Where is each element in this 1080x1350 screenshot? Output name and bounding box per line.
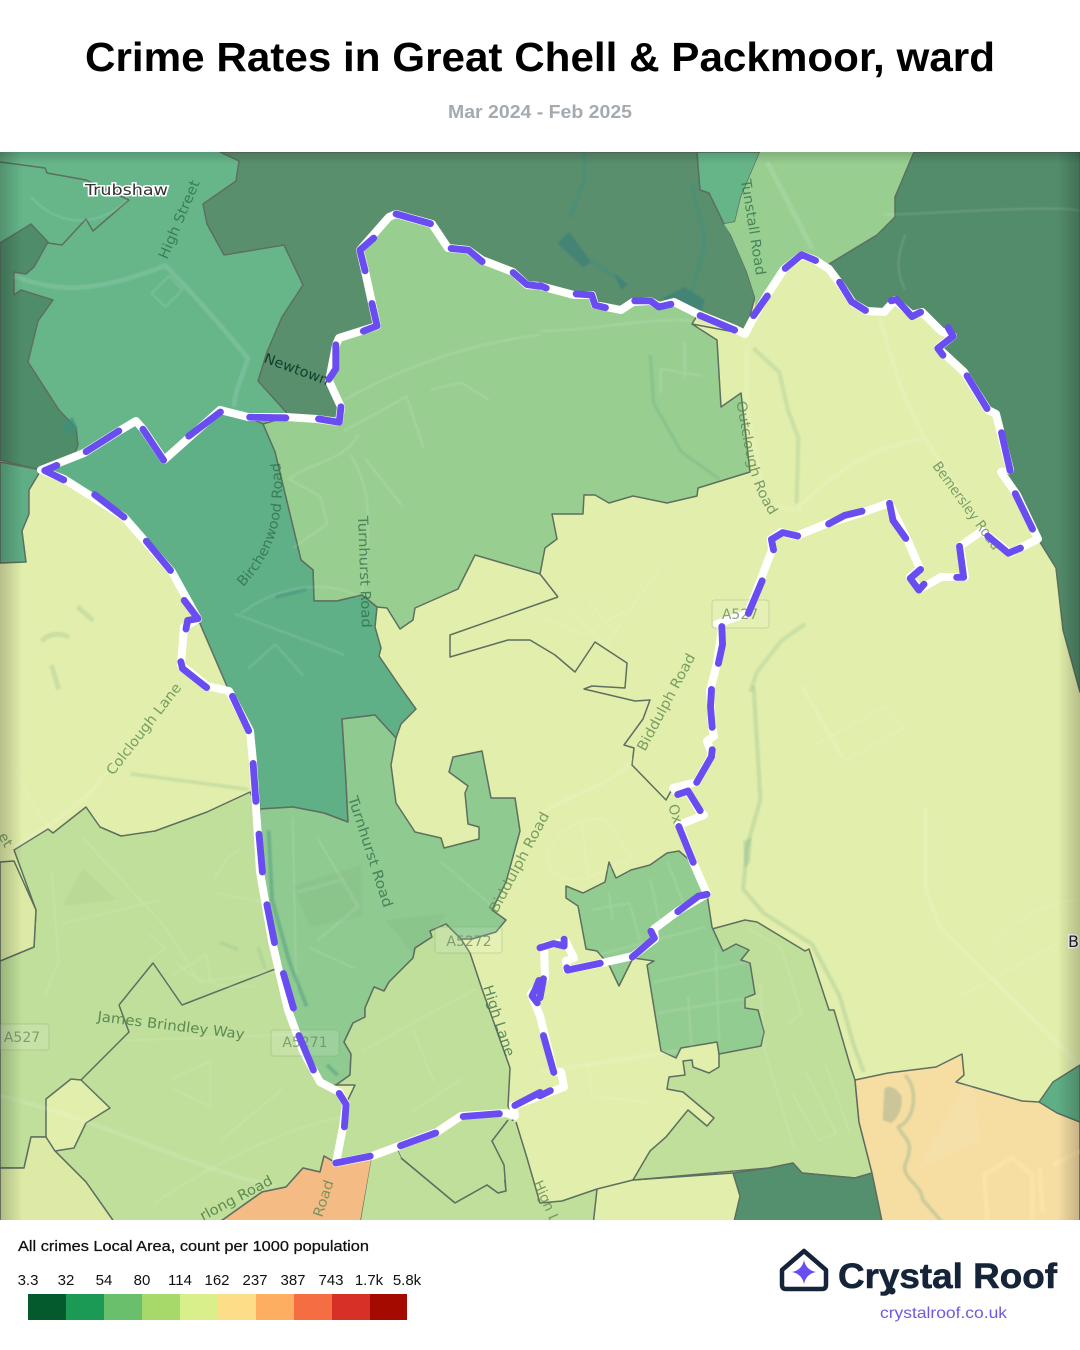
region: far-west dark ward [0,224,78,470]
label: B fragment: B [1068,932,1079,951]
legend tick labels: 1.7k [355,1272,384,1289]
region: west small green ward [0,462,41,563]
legend colour scale [28,1294,407,1320]
ward boundary: white outline [41,214,1038,1163]
label: Newtown: Newtown [262,351,331,389]
label: Trubshaw: Trubshaw [84,181,168,199]
legend tick labels: 54 [96,1272,112,1289]
legend tick labels [18,1272,422,1289]
legend tick labels: 80 [134,1272,150,1289]
legend tick labels: 387 [280,1272,306,1289]
subtitle: date range: Mar 2024 - Feb 2025 [448,102,632,122]
website url: crystalroof.co.uk [880,1305,1008,1322]
streets and waterways layer [0,152,1080,1226]
label: High Lane fragment: High L [529,1178,562,1225]
region: south-east corner green [1039,1065,1080,1122]
label: Oxford Road fragment: Ox [664,802,685,826]
label: Bemersley Road: Bemersley Road [929,459,1003,553]
road shield: A527 east [712,600,769,628]
legend [18,1239,422,1320]
label: Biddulph Road north: Biddulph Road [634,651,699,754]
region: Newtown dark north ward [203,152,755,422]
road shield: A527 east: A527 [722,607,758,623]
region: east light green [633,920,872,1180]
region: dark south ward [733,1163,883,1226]
region: north-west wards [0,152,303,470]
legend tick labels: 162 [204,1272,230,1289]
legend tick labels: 743 [318,1272,344,1289]
label: High Street: High Street [156,177,204,262]
title: Crime Rates in Great Chell & Packmoor, ward [85,34,995,80]
legend tick labels: 237 [242,1272,268,1289]
region: central south light green [336,924,515,1203]
region outline: central inner enclave [450,597,671,800]
legend tick labels: 114 [168,1272,192,1289]
region: south-east pale orange [855,1054,1080,1226]
icon: house with star [782,1251,826,1289]
region: top small green ward [697,152,760,224]
road shield: A5271: A5271 [282,1035,328,1051]
legend tick labels: 32 [58,1272,74,1289]
legend tick labels: 3.3 [18,1272,38,1289]
road shield: A5272: A5272 [446,934,492,950]
region: south light green strip [360,1120,597,1226]
label: Furlong Road: rlong Road [197,1173,276,1225]
legend title: All crimes Local Area, count per 1000 population [18,1239,369,1255]
label: Biddulph Road south: Biddulph Road [486,809,553,916]
ward boundary: purple dashes [45,214,1032,1163]
region: top light green ward [724,152,914,315]
region: south-east mid green block [566,851,764,1058]
region: orange high-crime ward [221,1155,372,1220]
label: Turnhurst Road north: Turnhurst Road [354,515,374,628]
label: James Brindley Way: James Brindley Way [95,1009,245,1043]
legend tick labels: 5.8k [393,1272,422,1289]
region: Birchenwood green [41,410,416,822]
label: Road fragment: Road [311,1178,338,1219]
region: left yellow enclave [0,861,36,961]
label: Colclough Lane: Colclough Lane [104,680,185,778]
road shield: A527 west [0,1024,49,1050]
region: Turnhurst south mid green [260,715,520,1087]
region: Great Chell north mid green [263,214,750,629]
label: Tunstall Road: Tunstall Road [737,177,768,276]
logo: Crystal Roof [782,1251,1057,1322]
road shield: A527 west: A527 [4,1030,40,1046]
road shield: A5271 [271,1030,339,1056]
label: Birchenwood Road: Birchenwood Road [236,464,282,586]
region: north-east dark ward [829,152,1080,692]
map labels [0,178,1080,1220]
label: High Lane: High Lane [479,983,517,1059]
region: south-west light green [0,792,346,1226]
label: Outclough Road: Outclough Road [737,402,778,515]
road shield: A5272 [435,927,502,953]
logo wordmark: Crystal Roof [838,1257,1057,1296]
label: Turnhurst Road south: Turnhurst Road [344,793,395,910]
region: bottom-left yellow [0,1137,117,1226]
